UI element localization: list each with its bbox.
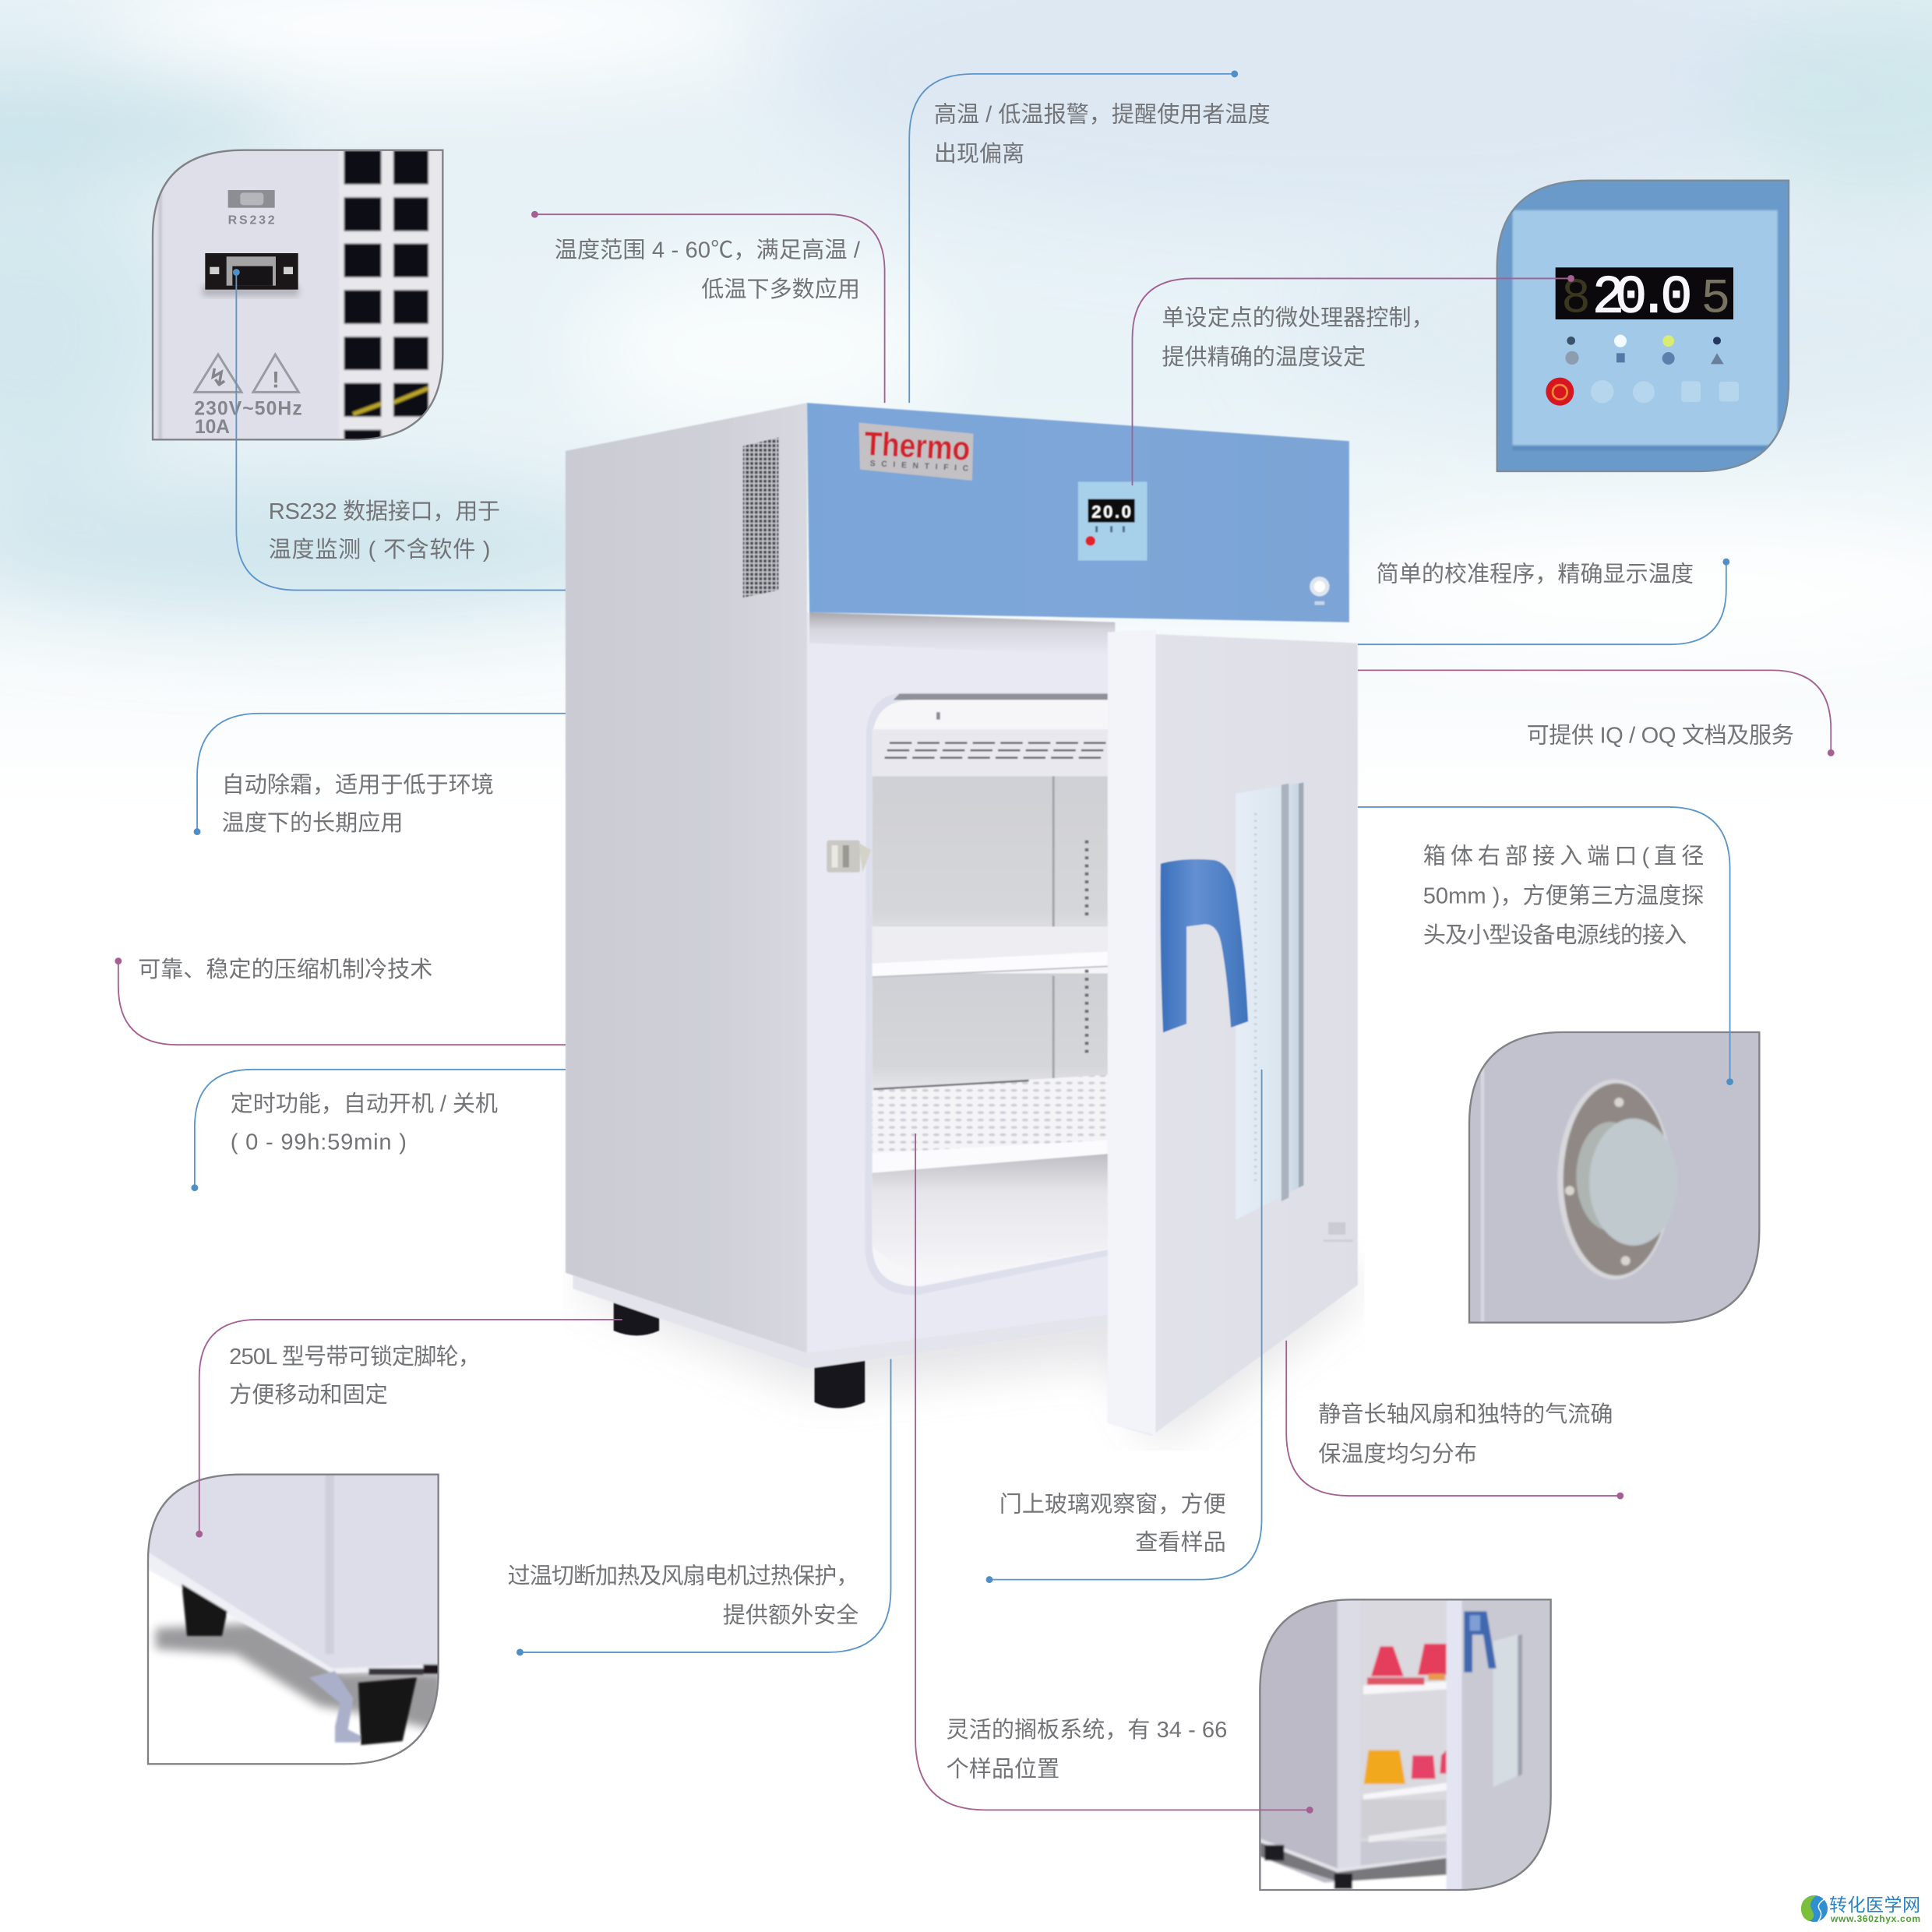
callout: lockable casters: 250L 型号带可锁定脚轮， xyxy=(229,1344,481,1370)
callout: quiet fan airflow: 保温度均匀分布 xyxy=(1318,1441,1477,1467)
callout: over-temperature protection: 过温切断加热及风扇电机过热保护， xyxy=(508,1563,858,1588)
inset: RS232 port: 10A xyxy=(195,417,230,438)
callout: door viewing window: 门上玻璃观察窗，方便 xyxy=(999,1492,1226,1518)
callout: compressor cooling xyxy=(115,957,566,1045)
base and feet xyxy=(1260,1839,1447,1872)
rear caster xyxy=(182,1584,227,1636)
front frame xyxy=(807,612,1115,1358)
peg holes xyxy=(1085,841,1088,1057)
inset: side access port xyxy=(1468,1031,1761,1324)
logo mark xyxy=(1801,1895,1828,1922)
door latch xyxy=(827,841,871,873)
warning labels xyxy=(195,354,298,392)
RS232 label: RS232 xyxy=(228,213,275,227)
back wall xyxy=(873,776,1115,955)
Thermo Scientific badge: SCIENTIFIC xyxy=(869,460,969,473)
watermark logo xyxy=(1801,1895,1920,1924)
Thermo Scientific badge xyxy=(858,422,973,481)
callout: temperature range: 温度范围 4 - 60℃，满足高温 / xyxy=(555,238,861,263)
front caster xyxy=(309,1665,442,1745)
power button xyxy=(1546,378,1574,406)
callout: right access port xyxy=(1358,807,1733,1085)
callout: right access port: 50mm )，方便第三方温度探 xyxy=(1423,883,1704,908)
callout: flexible shelf system xyxy=(915,1133,1313,1814)
cabinet underside xyxy=(132,1457,470,1673)
inset: RS232 port: ↯ xyxy=(208,365,228,391)
callout: temperature alarm: 出现偏离 xyxy=(934,141,1024,167)
callout: microprocessor control: 单设定点的微处理器控制， xyxy=(1162,305,1434,331)
serial connector xyxy=(203,253,298,296)
blue control header xyxy=(807,403,1349,622)
callout: lockable casters xyxy=(196,1320,622,1538)
callout: temperature alarm: 高温 / 低温报警，提醒使用者温度 xyxy=(934,102,1271,128)
callout: microprocessor control: 提供精确的温度设定 xyxy=(1162,344,1366,370)
control panel on cabinet: 20.0 xyxy=(1091,502,1131,521)
callout: automatic defrost xyxy=(194,714,566,836)
top air duct vents xyxy=(873,712,1115,776)
callout: temperature alarm xyxy=(909,70,1271,403)
side wall xyxy=(566,403,807,1356)
airflow/knob on header xyxy=(1310,576,1330,605)
Thermo Scientific badge: Thermo xyxy=(863,425,971,468)
callout: right access port: 箱 体 右 部 接 入 端 口 ( 直 径 xyxy=(1423,844,1704,869)
callout: RS232 data port: 温度监测 ( 不含软件 ) xyxy=(269,537,490,562)
floor shadow xyxy=(579,1269,1362,1447)
chamber opening xyxy=(865,693,1115,1295)
chamber floor xyxy=(873,1153,1115,1284)
callout: automatic defrost: 自动除霜，适用于低于环境 xyxy=(222,772,494,798)
callout: door viewing window xyxy=(986,1070,1262,1583)
shelves xyxy=(1363,1681,1447,1694)
callout: quiet fan airflow xyxy=(1286,1341,1624,1499)
callout: timer function: ( 0 - 99h:59min ) xyxy=(231,1130,407,1155)
side vent mesh xyxy=(743,437,779,598)
keypad buttons xyxy=(1591,380,1739,403)
callout: automatic defrost: 温度下的长期应用 xyxy=(222,810,403,836)
callout: RS232 data port: RS232 数据接口，用于 xyxy=(269,499,500,524)
callout: door viewing window: 查看样品 xyxy=(1135,1530,1226,1556)
callout: lockable casters: 方便移动和固定 xyxy=(229,1382,388,1408)
callout: timer function xyxy=(191,1070,566,1191)
digital display: 5 xyxy=(1701,272,1730,328)
steel flange xyxy=(1557,1080,1677,1279)
inset: RS232 port xyxy=(151,150,444,441)
open door xyxy=(1108,629,1358,1436)
callout: compressor cooling: 可靠、稳定的压缩机制冷技术 xyxy=(138,957,432,982)
door handle xyxy=(1160,859,1248,1032)
handle xyxy=(1464,1611,1497,1673)
feet xyxy=(614,1296,865,1408)
control panel on cabinet xyxy=(1078,481,1147,561)
plinth xyxy=(573,1275,1115,1369)
inset: lockable casters xyxy=(132,1457,470,1794)
inset: shelves with flasks xyxy=(1246,1589,1584,1927)
callout: microprocessor control xyxy=(1132,275,1574,485)
callout: flexible shelf system: 灵活的搁板系统，有 34 - 66 xyxy=(947,1717,1227,1743)
callout: timer function: 定时功能，自动开机 / 关机 xyxy=(231,1091,498,1117)
inset: control panel close-up xyxy=(1496,179,1790,472)
door mark xyxy=(1324,1222,1353,1242)
callout: temperature range xyxy=(531,211,885,403)
callout: right access port: 头及小型设备电源线的接入 xyxy=(1423,922,1687,948)
vent holes xyxy=(344,150,428,446)
callout: IQ/OQ documents xyxy=(1358,670,1835,756)
callout: RS232 data port xyxy=(233,269,566,591)
callout: quiet fan airflow: 静音长轴风扇和独特的气流确 xyxy=(1318,1401,1613,1427)
callout: calibration: 简单的校准程序，精确显示温度 xyxy=(1377,562,1694,587)
flasks xyxy=(1364,1644,1447,1784)
callout: temperature range: 低温下多数应用 xyxy=(701,277,860,302)
inset: RS232 port: ! xyxy=(272,367,280,393)
product: incubator cabinet xyxy=(566,403,1362,1447)
middle shelf xyxy=(873,926,1115,977)
shadow under blue panel xyxy=(809,612,1115,655)
cap xyxy=(1589,1119,1677,1246)
callout: IQ/OQ documents: 可提供 IQ / OQ 文档及服务 xyxy=(1527,723,1794,749)
callout: flexible shelf system: 个样品位置 xyxy=(947,1757,1059,1782)
digital display: 20.0 xyxy=(1592,268,1692,329)
watermark logo: www.360zhyx.com xyxy=(1830,1913,1920,1924)
floor shadow xyxy=(156,1623,444,1732)
digital display: 8 xyxy=(1561,272,1591,328)
indicator lights xyxy=(1565,335,1724,365)
lower perforated shelf xyxy=(873,1074,1115,1173)
RS232 label xyxy=(228,190,275,227)
callout: over-temperature protection: 提供额外安全 xyxy=(723,1602,858,1628)
door xyxy=(1447,1599,1462,1893)
watermark logo: 转化医学网 xyxy=(1829,1895,1920,1915)
yellow wire xyxy=(353,388,428,414)
door window xyxy=(1236,782,1303,1220)
inset: RS232 port: 230V~50Hz xyxy=(194,399,302,420)
digital display xyxy=(1555,267,1733,319)
callout: over-temperature protection xyxy=(508,1359,890,1655)
callout: calibration xyxy=(1358,559,1729,644)
